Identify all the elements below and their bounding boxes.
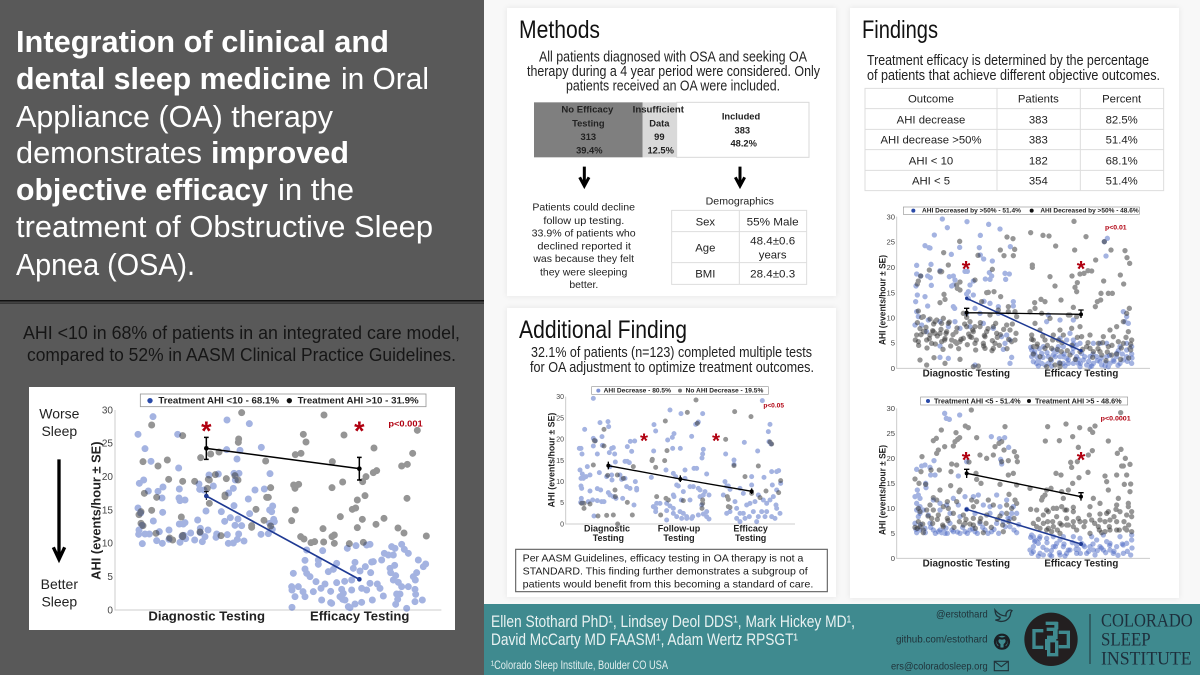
patient flow bar: 48.2% — [730, 139, 758, 149]
repeated testing scatter chart: Testing — [663, 533, 695, 543]
repeated testing scatter chart: 10 — [556, 479, 564, 486]
scatter chart: AHI decreased by 50 percent: 15 — [886, 288, 895, 297]
sleep direction labels and arrow: Sleep — [41, 594, 77, 610]
scatter chart: treatment AHI below 5: Treatment AHI >5 - 48.6% — [1035, 398, 1122, 405]
outcomes table: AHI < 10 — [909, 155, 953, 167]
scatter chart: treatment AHI below 5: Efficacy Testing — [1044, 559, 1118, 570]
arrow: to declined note — [580, 167, 589, 186]
declined testing note — [532, 203, 636, 291]
repeated testing scatter chart: 30 — [556, 394, 564, 401]
demographics table: Demographics — [706, 196, 774, 207]
patient flow bar: Insufficient — [633, 105, 684, 115]
title: in the — [278, 172, 354, 207]
scatter chart: treatment AHI below 5: 0 — [891, 554, 895, 563]
legend — [140, 394, 426, 407]
scatter chart: treatment AHI below 5 — [878, 397, 1150, 570]
repeated testing scatter chart: Testing — [735, 533, 766, 543]
patient flow bar: Data — [649, 118, 670, 128]
findings description: Treatment efficacy is determined by the percentage — [867, 53, 1149, 69]
scatter chart: treatment AHI below 5: 30 — [886, 404, 895, 413]
key statistic text: AHI <10 in 68% of patients in an integrated care model, — [23, 323, 460, 343]
heading: findings: Findings — [862, 16, 938, 44]
outcomes table: 354 — [1029, 176, 1048, 188]
demographics table: 48.4±0.6 — [750, 235, 795, 247]
scatter chart: AHI decreased by 50 percent: * — [1077, 257, 1086, 282]
demographics table: BMI — [695, 269, 715, 281]
sleep direction labels and arrow: Sleep — [41, 423, 77, 439]
repeated testing scatter chart: * — [712, 430, 721, 453]
panel: findings — [850, 8, 1179, 598]
authors: David McCarty MD FAASM¹, Adam Wertz RPSGT¹ — [491, 631, 798, 649]
authors: Ellen Stothard PhD¹, Lindsey Deol DDS¹, Mark Hickey MD¹, — [491, 613, 855, 631]
outcomes table: 82.5% — [1106, 114, 1138, 126]
scatter chart: AHI decreased by 50 percent: AHI Decreased by >50% - 48.6% — [1040, 208, 1139, 215]
scatter chart: AHI decreased by 50 percent: Diagnostic Testing — [923, 369, 1010, 380]
additional finding description: 32.1% of patients (n=123) completed multiple tests — [531, 345, 812, 361]
sleep direction labels and arrow: Worse — [39, 405, 80, 421]
repeated testing scatter chart: p<0.05 — [763, 402, 784, 409]
scatter chart: treatment AHI below 5: 20 — [886, 454, 895, 463]
scatter chart: AHI decreased by 50 percent: 10 — [886, 314, 895, 323]
scatter chart: AHI decreased by 50 percent: 20 — [886, 263, 895, 272]
additional finding description — [530, 345, 814, 376]
logo: colorado sleep institute: SLEEP — [1101, 630, 1151, 651]
scatter chart: treatment AHI below 5: * — [1077, 447, 1086, 472]
declined testing note: declined reported it — [537, 241, 631, 252]
patient flow bar: No Efficacy — [561, 105, 614, 115]
outcomes table: 383 — [1029, 114, 1048, 126]
outcomes table: 383 — [1029, 135, 1048, 147]
repeated testing scatter chart: Efficacy — [733, 523, 768, 533]
footer band — [484, 604, 1200, 675]
title: dental sleep medicine — [16, 61, 331, 96]
scatter chart: AHI decreased by 50 percent: Efficacy Testing — [1044, 369, 1118, 380]
declined testing note: was because they felt — [532, 254, 634, 265]
methods description — [527, 50, 821, 94]
scatter points — [138, 413, 426, 608]
scatter chart: treatment AHI below 5: 10 — [886, 504, 895, 513]
scatter chart: AHI decreased by 50 percent: 0 — [891, 364, 895, 373]
axes: AHI (events/hour ± SE) — [89, 441, 103, 580]
scatter chart: treatment AHI below 5: 25 — [886, 429, 895, 438]
repeated testing scatter chart: Follow-up — [658, 523, 701, 533]
outcomes table: AHI decrease — [897, 114, 965, 126]
demographics table: Sex — [696, 216, 715, 228]
axes: 30 — [102, 405, 113, 416]
repeated testing scatter chart: Testing — [593, 533, 624, 543]
additional finding description: for OA adjustment to optimize treatment outcomes. — [530, 360, 814, 376]
scatter chart: AHI decreased by 50 percent: AHI (events/hour ± SE) — [878, 255, 888, 345]
axes: 25 — [102, 439, 113, 450]
title: treatment of Obstructive Sleep — [16, 209, 433, 244]
panel: additional finding — [507, 308, 836, 597]
heading: methods: Methods — [519, 16, 600, 44]
demographics table: 55% Male — [747, 216, 799, 228]
outcomes table: AHI decrease >50% — [880, 135, 982, 147]
axes: 10 — [102, 539, 113, 550]
patient flow bar: 313 — [581, 132, 596, 142]
repeated testing scatter chart: No AHI Decrease - 19.5% — [686, 388, 763, 395]
patient flow bar — [534, 102, 809, 157]
affiliation: ¹Colorado Sleep Institute, Boulder CO USA — [491, 658, 668, 672]
callout: AASM guideline note: STANDARD. This finding further demonstrates a subgroup of — [523, 567, 808, 578]
repeated testing scatter chart: AHI Decrease - 80.5% — [604, 388, 671, 395]
contact details: ers@coloradosleep.org — [891, 661, 988, 672]
declined testing note: Patients could decline — [532, 203, 635, 214]
scatter chart: treatment AHI below 5: Treatment AHI <5 - 51.4% — [934, 398, 1021, 405]
demographics table: years — [759, 250, 787, 262]
key statistic text — [23, 323, 460, 365]
scatter chart: AHI decreased by 50 percent: * — [962, 257, 971, 282]
scatter chart: AHI decreased by 50 percent: AHI Decreased by >50% - 51.4% — [922, 208, 1021, 215]
patient flow bar: 12.5% — [647, 145, 675, 155]
axes: Efficacy Testing — [310, 609, 409, 624]
heading: additional finding: Additional Finding — [519, 316, 687, 344]
outcomes table — [865, 88, 1164, 191]
axes — [89, 405, 441, 624]
title: improved — [211, 135, 349, 170]
panel: left key message — [0, 0, 484, 675]
outcomes table: Percent — [1102, 94, 1142, 106]
main scatter chart — [29, 387, 455, 630]
methods description: patients received an OA were included. — [566, 78, 780, 94]
repeated testing scatter chart: 0 — [560, 521, 564, 528]
contact details — [891, 610, 988, 672]
sleep direction labels and arrow: Better — [41, 576, 78, 592]
legend: Treatment AHI <10 - 68.1% — [158, 396, 280, 406]
icon: email — [994, 661, 1008, 671]
findings description: of patients that achieve different objective outcomes. — [867, 68, 1160, 84]
patient flow bar: 99 — [654, 132, 665, 142]
contact details: @erstothard — [936, 610, 988, 621]
axes: Diagnostic Testing — [148, 609, 265, 624]
declined testing note: better. — [569, 280, 598, 291]
trend lines — [204, 437, 362, 582]
title — [16, 24, 433, 282]
scatter chart: treatment AHI below 5: * — [962, 447, 971, 472]
repeated testing scatter chart: 20 — [556, 437, 564, 444]
demographics table: 28.4±0.3 — [750, 269, 795, 281]
icon: github — [995, 635, 1009, 649]
outcomes table: 68.1% — [1106, 155, 1138, 167]
key statistic text: compared to 52% in AASM Clinical Practice Guidelines. — [27, 345, 456, 365]
callout: AASM guideline note — [516, 549, 827, 592]
outcomes table: 51.4% — [1106, 135, 1138, 147]
scatter chart: AHI decreased by 50 percent: 30 — [886, 212, 895, 221]
arrow: to demographics — [735, 167, 745, 186]
title: demonstrates — [16, 135, 202, 170]
axes: 5 — [107, 572, 113, 583]
significance markers — [201, 416, 423, 446]
scatter chart: treatment AHI below 5: p<0.0001 — [1101, 416, 1131, 423]
declined testing note: they were sleeping — [540, 267, 628, 278]
declined testing note: follow up testing. — [543, 216, 624, 227]
panel: methods — [507, 8, 836, 296]
outcomes table: AHI < 5 — [912, 176, 950, 188]
repeated testing scatter chart: AHI (events/hour ± SE) — [546, 413, 556, 507]
callout: AASM guideline note: Per AASM Guidelines, efficacy testing in OA therapy is not a — [523, 554, 804, 565]
demographics table — [672, 196, 807, 284]
logo: colorado sleep institute: INSTITUTE — [1101, 648, 1192, 669]
title: Apnea (OSA). — [16, 247, 195, 282]
repeated testing scatter chart: Diagnostic — [584, 523, 630, 533]
scatter chart: treatment AHI below 5: Diagnostic Testing — [923, 559, 1010, 570]
patient flow bar: Included — [722, 111, 760, 121]
contact details: github.com/estothard — [896, 635, 988, 646]
methods description: All patients diagnosed with OSA and seeking OA — [539, 50, 807, 66]
title: Integration of clinical and — [16, 24, 389, 59]
patient flow bar: 383 — [735, 125, 750, 135]
findings description — [867, 53, 1160, 84]
scatter chart: AHI decreased by 50 percent — [878, 207, 1150, 380]
outcomes table: Outcome — [908, 94, 954, 106]
repeated testing scatter chart: 15 — [556, 458, 564, 465]
title: in Oral — [341, 61, 429, 96]
logo: colorado sleep institute — [1024, 611, 1193, 669]
scatter chart: AHI decreased by 50 percent: p<0.01 — [1105, 224, 1127, 231]
significance markers: p<0.001 — [388, 419, 423, 429]
repeated testing scatter chart: 5 — [560, 500, 564, 507]
scatter chart: treatment AHI below 5: AHI (events/hour ± SE) — [878, 445, 888, 535]
scatter chart: treatment AHI below 5: 5 — [891, 529, 895, 538]
axes: 15 — [102, 505, 113, 516]
outcomes table: 51.4% — [1106, 176, 1138, 188]
patient flow bar: 39.4% — [576, 145, 603, 155]
title: Appliance (OA) therapy — [16, 99, 333, 134]
demographics table: Age — [695, 242, 715, 254]
axes: 20 — [102, 472, 113, 483]
legend: Treatment AHI >10 - 31.9% — [298, 396, 419, 406]
outcomes table: Patients — [1018, 94, 1059, 106]
repeated testing scatter chart: * — [640, 430, 649, 453]
icon: twitter — [995, 610, 1012, 621]
repeated testing scatter chart — [546, 387, 795, 543]
scatter chart: AHI decreased by 50 percent: 5 — [891, 339, 895, 348]
significance markers: * — [201, 416, 212, 446]
repeated testing scatter chart: 25 — [556, 416, 564, 423]
title: objective efficacy — [16, 172, 269, 207]
callout: AASM guideline note: patients would benefit from this becoming a standard of care. — [523, 580, 813, 591]
scatter chart: AHI decreased by 50 percent: 25 — [886, 238, 895, 247]
authors — [491, 613, 855, 649]
scatter chart: treatment AHI below 5: 15 — [886, 479, 895, 488]
outcomes table: 182 — [1029, 155, 1048, 167]
patient flow bar: Testing — [572, 118, 605, 128]
sleep direction labels and arrow — [39, 405, 80, 610]
declined testing note: 33.9% of patients who — [532, 229, 636, 240]
methods description: therapy during a 4 year period were considered. Only — [527, 64, 821, 80]
significance markers: * — [354, 416, 365, 446]
axes: 0 — [107, 605, 113, 616]
